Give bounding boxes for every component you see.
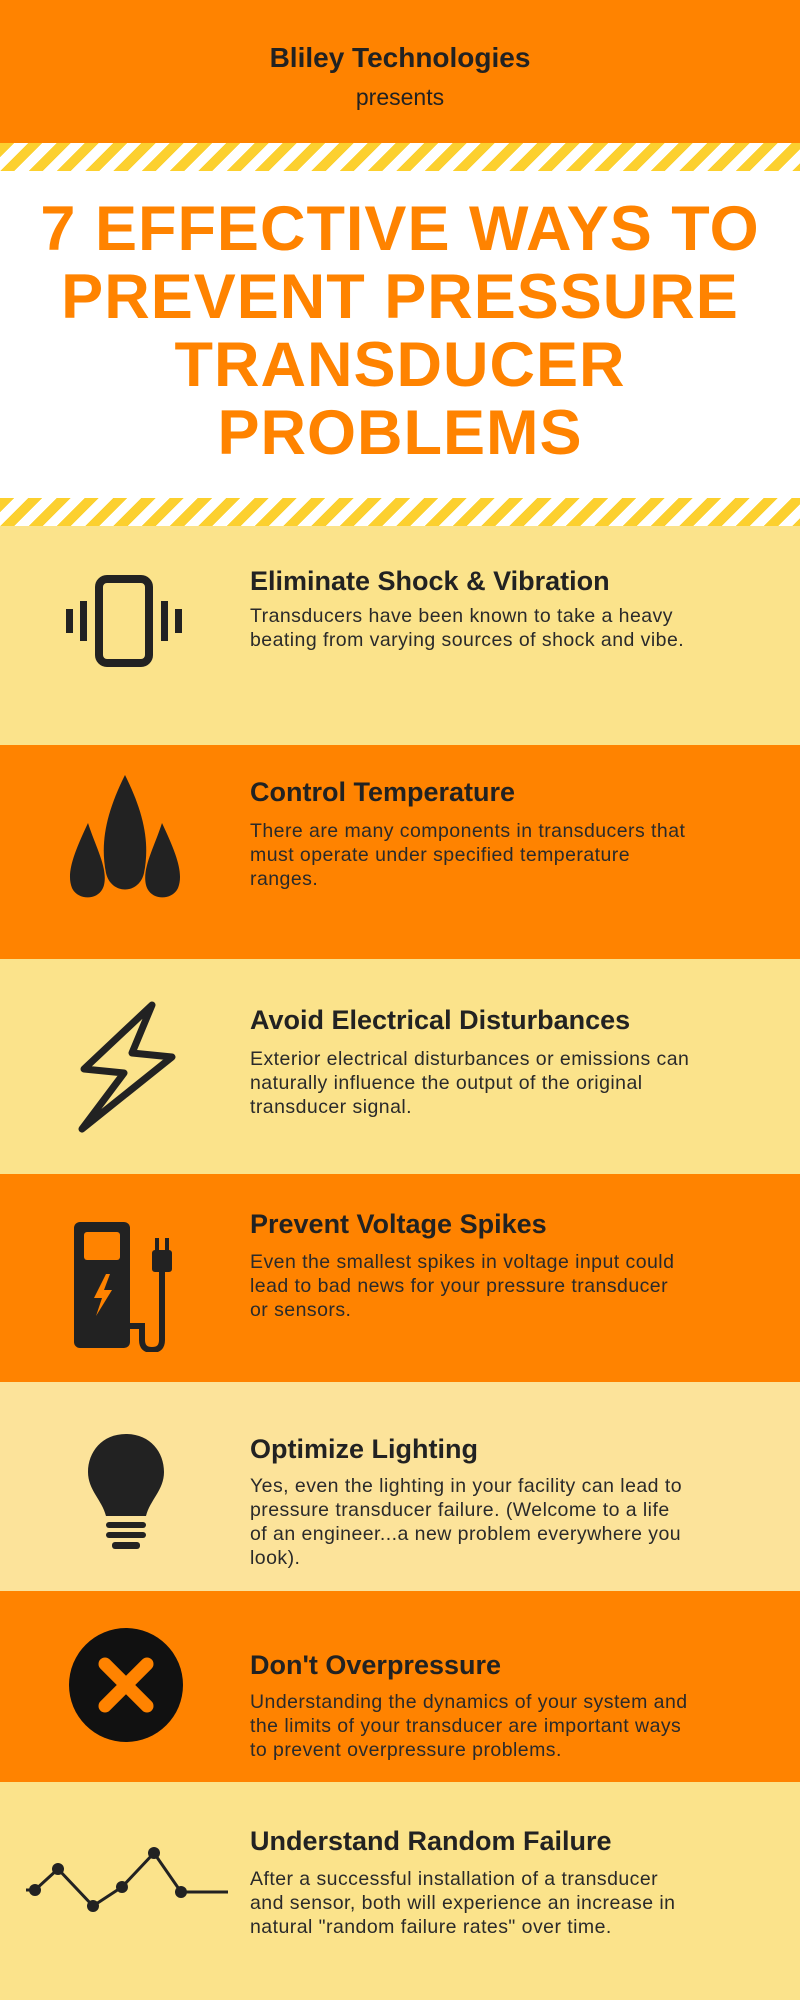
text: of an engineer...a new problem everywhere you [250, 1523, 681, 1545]
text: Transducers have been known to take a heavy [250, 605, 673, 627]
text: look). [250, 1547, 300, 1569]
icon: charging station [74, 1222, 172, 1352]
icon: flames [70, 775, 180, 898]
text: transducer signal. [250, 1096, 412, 1118]
text [250, 1868, 675, 1938]
heading: Understand Random Failure [250, 1826, 612, 1856]
title: PREVENT PRESSURE [61, 262, 739, 332]
panel: shock & vibration [0, 526, 800, 745]
panel: voltage spikes [0, 1174, 800, 1382]
heading: Control Temperature [250, 777, 515, 807]
panel: electrical disturbances [0, 959, 800, 1174]
text: ranges. [250, 868, 318, 890]
text [250, 605, 684, 651]
panel: random failure [0, 1782, 800, 2000]
text: and sensor, both will experience an increase in [250, 1892, 675, 1914]
text: to prevent overpressure problems. [250, 1739, 562, 1761]
text [250, 1251, 674, 1321]
text: After a successful installation of a transducer [250, 1868, 658, 1890]
text: Understanding the dynamics of your system and [250, 1691, 688, 1713]
text [250, 1475, 682, 1569]
icon: vibrating phone [66, 575, 182, 667]
icon: light bulb [88, 1434, 164, 1549]
header [0, 0, 800, 143]
presents: presents [356, 84, 444, 110]
panel: lighting [0, 1382, 800, 1591]
text: Exterior electrical disturbances or emissions can [250, 1048, 689, 1070]
text: pressure transducer failure. (Welcome to a life [250, 1499, 670, 1521]
heading: Prevent Voltage Spikes [250, 1209, 547, 1239]
text: Yes, even the lighting in your facility can lead to [250, 1475, 682, 1497]
heading: Don't Overpressure [250, 1650, 501, 1680]
text: or sensors. [250, 1299, 351, 1321]
heading: Eliminate Shock & Vibration [250, 566, 610, 596]
title: PROBLEMS [217, 398, 583, 468]
panel: overpressure [0, 1591, 800, 1782]
icon: line chart [26, 1847, 228, 1912]
text: There are many components in transducers that [250, 820, 685, 842]
text [250, 820, 685, 890]
text: beating from varying sources of shock and vibe. [250, 629, 684, 651]
text: the limits of your transducer are important ways [250, 1715, 681, 1737]
text: lead to bad news for your pressure transducer [250, 1275, 668, 1297]
text: Even the smallest spikes in voltage input could [250, 1251, 674, 1273]
text: naturally influence the output of the original [250, 1072, 643, 1094]
icon: x circle [69, 1628, 183, 1742]
icon: lightning [78, 1002, 176, 1133]
title: TRANSDUCER [174, 330, 626, 400]
text [250, 1691, 688, 1761]
title [40, 194, 760, 468]
heading: Avoid Electrical Disturbances [250, 1005, 630, 1035]
text: must operate under specified temperature [250, 844, 630, 866]
heading: Optimize Lighting [250, 1434, 478, 1464]
text [250, 1048, 689, 1118]
text: natural "random failure rates" over time. [250, 1916, 612, 1938]
title: 7 EFFECTIVE WAYS TO [40, 194, 760, 264]
company name: Bliley Technologies [270, 42, 530, 73]
panel: temperature [0, 745, 800, 959]
